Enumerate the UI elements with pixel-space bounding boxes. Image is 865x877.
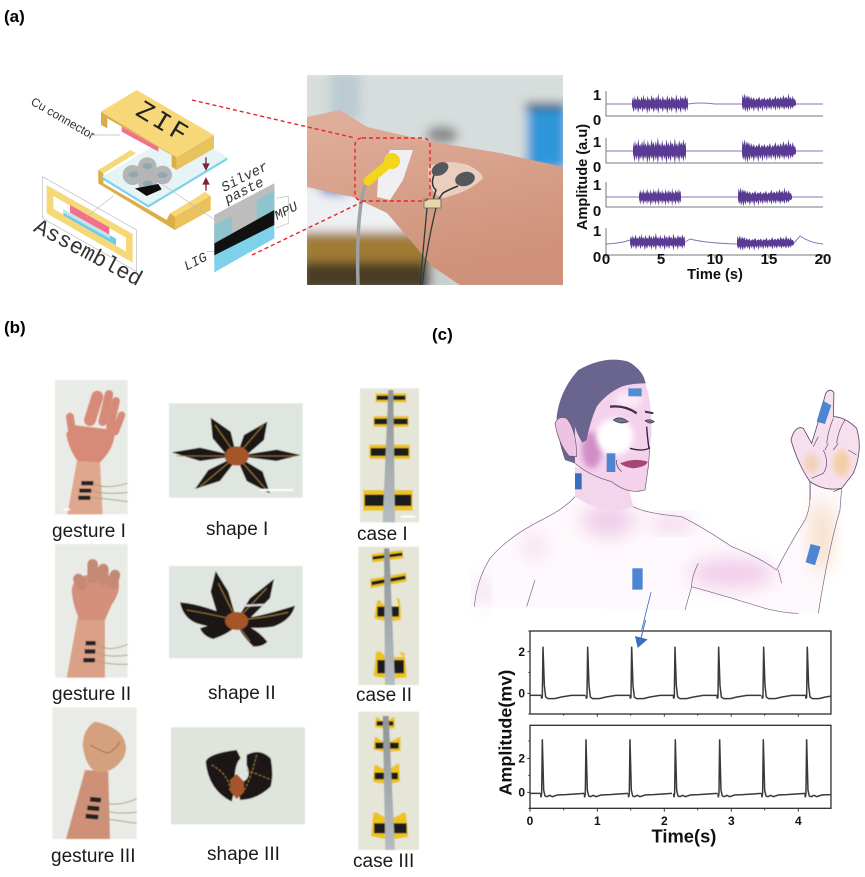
panel a: exploded device diagram xyxy=(28,90,302,293)
bottom ECG chart: 2 xyxy=(518,752,525,766)
y tick labels: 1 xyxy=(593,134,601,151)
panel label (b): (b) xyxy=(4,318,26,337)
label: Silver paste: paste xyxy=(221,175,267,209)
x tick labels: 1 xyxy=(594,814,601,828)
caption: gesture I: gesture I xyxy=(52,521,126,542)
ear xyxy=(555,417,577,457)
x axis title: Time (s) xyxy=(687,267,743,283)
top ECG chart: 0 xyxy=(518,687,525,701)
label: LIG: LIG xyxy=(182,251,210,275)
y axis title: Amplitude(mv) xyxy=(496,670,516,796)
caption: gesture II: gesture II xyxy=(52,684,131,705)
panel c: illustrated man with sensors xyxy=(474,360,859,630)
red dashed zoom callout xyxy=(192,100,430,255)
x tick labels: 4 xyxy=(795,814,802,828)
caption: case I: case I xyxy=(357,524,408,545)
y tick labels: 0 xyxy=(593,203,601,220)
shape I photo xyxy=(169,403,303,498)
y tick labels xyxy=(593,87,601,266)
label: Silver paste: Silver xyxy=(219,159,271,196)
gesture II photo xyxy=(55,544,128,678)
bottom ECG chart: 0 xyxy=(518,786,525,800)
y tick labels: 1 xyxy=(593,177,601,194)
y tick labels: 0 xyxy=(593,159,601,176)
gesture I photo xyxy=(55,380,128,514)
gesture III photo xyxy=(52,707,137,839)
label: Assembled: Assembled xyxy=(29,215,146,293)
caption: case III: case III xyxy=(353,851,414,872)
y tick labels: 1 xyxy=(593,223,601,240)
mouth xyxy=(620,460,648,468)
hand with pointing finger xyxy=(791,390,859,500)
EMG traces xyxy=(606,93,823,251)
panel label (c): (c) xyxy=(432,325,453,344)
lower connector base xyxy=(98,150,211,230)
case I photo xyxy=(360,388,419,522)
flexible film with silver paste and LIG xyxy=(102,129,227,208)
y tick labels: 1 xyxy=(593,87,601,104)
x tick labels: 2 xyxy=(661,814,668,828)
shape II photo xyxy=(169,566,303,658)
head xyxy=(555,360,654,491)
label: MPU: MPU xyxy=(273,200,302,224)
caption: case II: case II xyxy=(356,685,412,706)
x tick labels: 15 xyxy=(761,251,777,268)
x tick labels: 5 xyxy=(657,251,665,268)
torso and arm xyxy=(474,482,842,613)
caption: shape III: shape III xyxy=(207,844,280,865)
top ECG chart: 2 xyxy=(518,645,525,659)
sensor patch with yellow snap xyxy=(358,150,413,285)
eyes and brows xyxy=(610,406,654,423)
caption: shape II: shape II xyxy=(208,683,276,704)
x tick labels xyxy=(527,814,802,828)
x tick labels: 3 xyxy=(728,814,735,828)
top ZIF connector block xyxy=(101,90,214,170)
x tick labels: 20 xyxy=(815,251,831,268)
label: ZIF: ZIF xyxy=(130,96,195,152)
arrow to ECG peak xyxy=(635,620,648,648)
caption: shape I: shape I xyxy=(206,519,268,540)
panel b: gesture photos xyxy=(52,380,305,839)
panel a: EMG amplitude chart xyxy=(575,87,831,283)
x tick labels: 0 xyxy=(602,251,610,268)
x tick labels xyxy=(602,251,831,268)
panel a: photo of forearm with sensors xyxy=(307,75,563,285)
cross section of layers xyxy=(90,135,288,272)
arrow: press up xyxy=(203,179,209,191)
bottom ECG chart xyxy=(518,725,849,812)
top ECG chart xyxy=(518,631,850,717)
tattoo electrode patch xyxy=(420,159,483,285)
panel b: case photos xyxy=(358,388,419,850)
axes xyxy=(606,91,823,258)
arrow: press down xyxy=(203,157,209,169)
neck xyxy=(575,467,633,510)
assembled view inset xyxy=(43,177,137,272)
shape III photo xyxy=(171,727,305,824)
case II photo xyxy=(358,547,419,685)
panel c: ECG charts xyxy=(496,620,850,847)
x axis title: Time(s) xyxy=(652,826,716,847)
y tick labels: 0 xyxy=(593,249,601,266)
arrow line from chest xyxy=(642,592,651,630)
hair xyxy=(557,360,646,463)
x tick labels: 10 xyxy=(707,251,723,268)
caption: gesture III: gesture III xyxy=(51,846,136,867)
nose xyxy=(630,427,649,450)
sensor patches xyxy=(575,388,831,590)
case III photo xyxy=(358,712,419,850)
y tick labels: 0 xyxy=(593,112,601,129)
label: Cu connector: Cu connector xyxy=(28,94,97,142)
x tick labels: 0 xyxy=(527,814,534,828)
y axis title: Amplitude (a.u) xyxy=(575,124,591,230)
panel label (a): (a) xyxy=(4,7,25,26)
